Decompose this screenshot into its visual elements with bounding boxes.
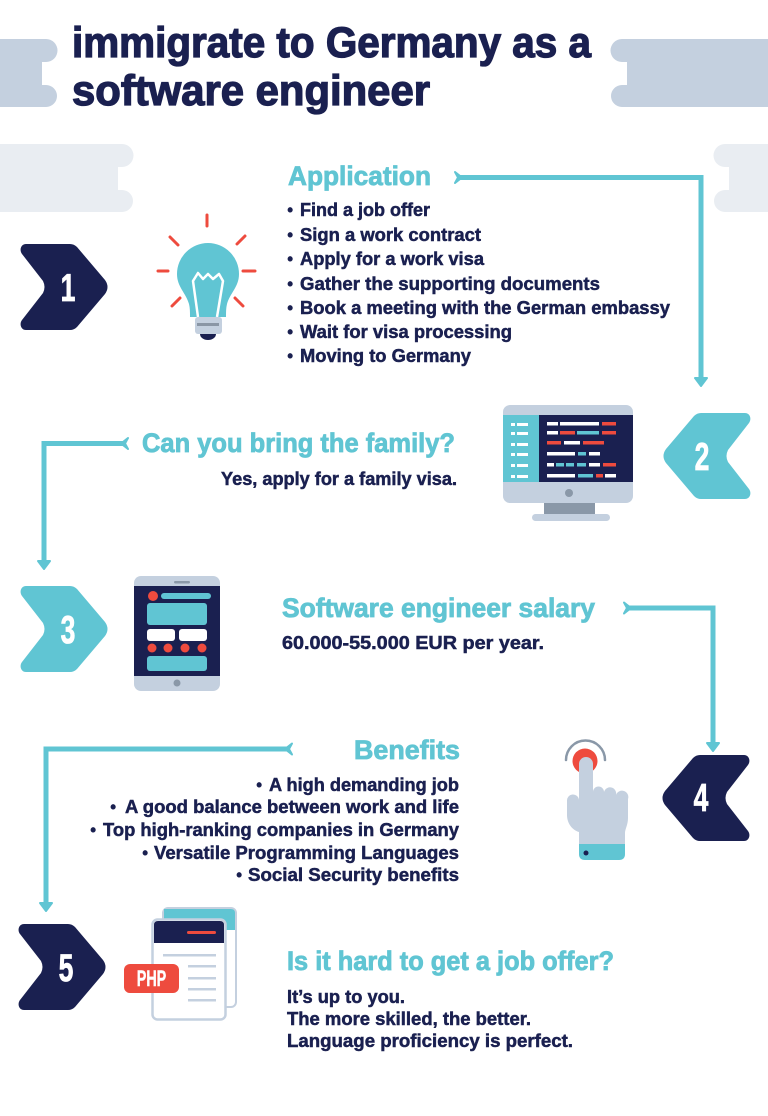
- arrow: salary to step 4: [624, 602, 719, 751]
- arrow: family to step 3: [38, 438, 128, 569]
- icon: light bulb: [158, 215, 255, 340]
- benefits list: A good balance between work and life: [125, 796, 459, 817]
- benefits list: Top high-ranking companies in Germany: [103, 819, 460, 840]
- application steps list: •: [287, 225, 293, 245]
- header ribbon left: [0, 39, 58, 107]
- benefits list: Versatile Programming Languages: [154, 842, 459, 863]
- heading: benefits: Benefits: [354, 735, 460, 765]
- benefits list: Social Security benefits: [248, 864, 459, 885]
- faint ribbon right: [714, 144, 768, 212]
- step 2 badge: 2: [695, 436, 709, 479]
- step 4 badge: [662, 755, 749, 841]
- heading: family: Can you bring the family?: [142, 428, 455, 458]
- benefits list: [90, 774, 460, 885]
- title: immigrate to Germany as a: [72, 20, 591, 67]
- icon: tablet: [134, 576, 220, 691]
- salary value: 60.000-55.000 EUR per year.: [282, 632, 544, 653]
- title: software engineer: [72, 68, 430, 115]
- heading: application: Application: [288, 161, 431, 191]
- icon: PHP documents: [124, 908, 236, 1020]
- icon: hand pressing button: [566, 740, 628, 860]
- step 1 badge: [21, 244, 107, 330]
- job offer answer: Language proficiency is perfect.: [287, 1030, 573, 1051]
- step 1 badge: 1: [61, 267, 75, 310]
- application steps list: [287, 199, 671, 366]
- application steps list: Gather the supporting documents: [300, 273, 600, 294]
- application steps list: •: [287, 298, 293, 318]
- icon: desktop monitor with code: [503, 405, 633, 521]
- benefits list: •: [110, 797, 116, 817]
- application steps list: •: [287, 322, 293, 342]
- job offer answer: [287, 986, 573, 1051]
- step 5 badge: [19, 924, 105, 1010]
- application steps list: •: [287, 274, 293, 294]
- application steps list: Find a job offer: [300, 199, 430, 220]
- application steps list: Apply for a work visa: [300, 248, 485, 269]
- step 4 badge: 4: [694, 777, 709, 820]
- job offer answer: It’s up to you.: [287, 986, 405, 1007]
- application steps list: Book a meeting with the German embassy: [300, 297, 671, 318]
- step 3 badge: [21, 586, 107, 672]
- benefits list: •: [142, 843, 148, 863]
- faint ribbon left: [0, 144, 134, 212]
- heading: salary: Software engineer salary: [282, 593, 595, 623]
- heading: job offer: Is it hard to get a job offer?: [287, 946, 614, 976]
- job offer answer: The more skilled, the better.: [287, 1008, 531, 1029]
- benefits list: A high demanding job: [269, 774, 459, 795]
- benefits list: •: [90, 820, 96, 840]
- application steps list: Wait for visa processing: [300, 321, 512, 342]
- step 2 badge: [664, 413, 750, 499]
- icon: PHP documents: PHP: [137, 966, 166, 991]
- benefits list: •: [256, 775, 262, 795]
- application steps list: Sign a work contract: [300, 224, 481, 245]
- step 5 badge: 5: [59, 947, 73, 990]
- arrow: benefits to step 5: [40, 744, 292, 911]
- arrow: application to step 2: [455, 172, 707, 386]
- step 3 badge: 3: [61, 609, 75, 652]
- benefits list: •: [236, 865, 242, 885]
- application steps list: Moving to Germany: [300, 345, 472, 366]
- application steps list: •: [287, 249, 293, 269]
- header ribbon right: [610, 39, 768, 107]
- title: [72, 20, 591, 115]
- application steps list: •: [287, 346, 293, 366]
- family answer: Yes, apply for a family visa.: [221, 468, 457, 489]
- application steps list: •: [287, 200, 293, 220]
